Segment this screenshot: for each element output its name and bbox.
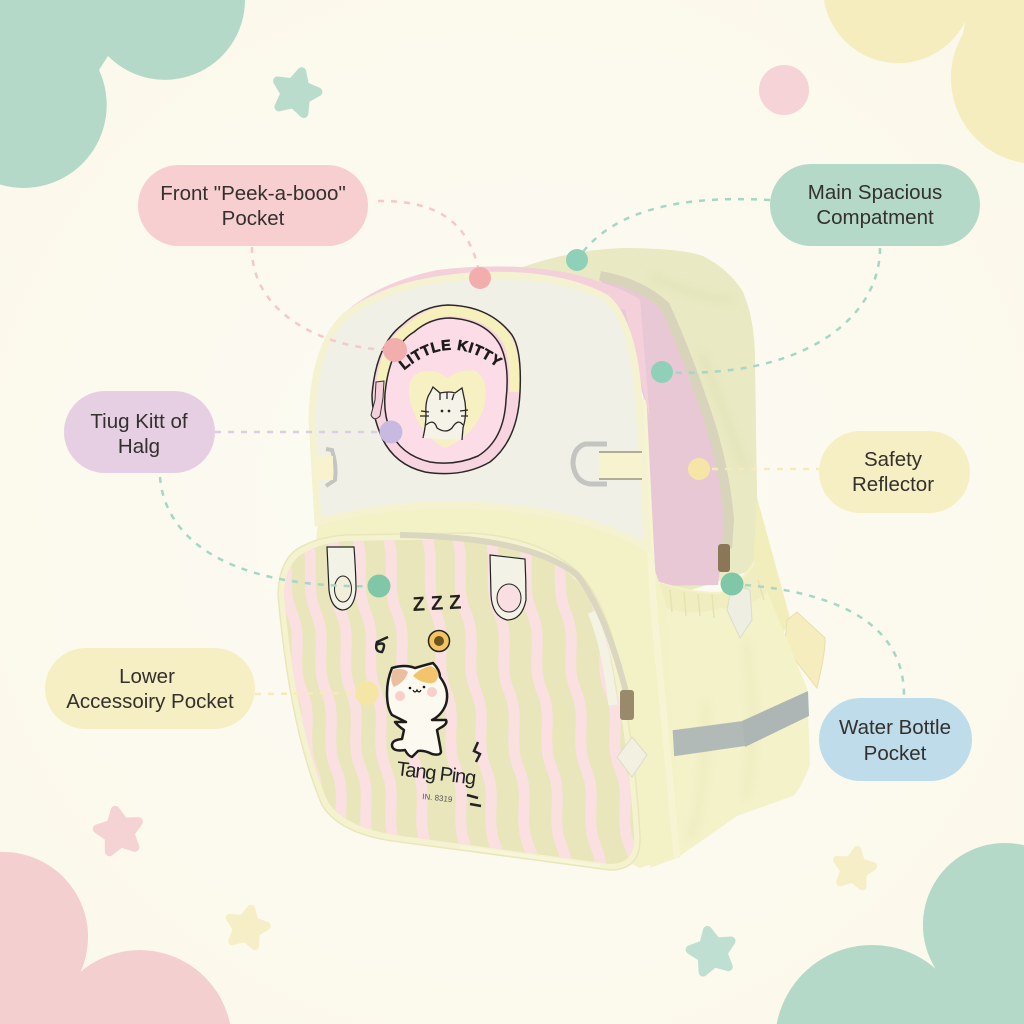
- rear body panel: [520, 248, 757, 600]
- zipper pull: [371, 381, 384, 419]
- label: safety reflector: Reflector: [852, 473, 934, 496]
- decoration: green star top: [271, 66, 322, 116]
- pocket zipper: [400, 535, 626, 692]
- label: lower accessory pocket: [45, 648, 255, 729]
- label: lower accessory pocket: Lower: [119, 665, 175, 688]
- reflective strip: [667, 721, 745, 757]
- badge inner: [385, 318, 507, 463]
- connector: main compartment top: [577, 199, 770, 260]
- label: water bottle pocket: [819, 698, 972, 781]
- yarn bubble icon: [428, 630, 450, 652]
- connector: safety reflector: [699, 468, 819, 470]
- little kitty badge: [370, 304, 522, 474]
- back strap and tab: [750, 490, 825, 688]
- badge outer: [372, 305, 520, 474]
- left loop tab: [327, 547, 356, 610]
- badge heart: [409, 370, 486, 448]
- decoration: bottom-left pink cloud: [0, 852, 230, 1024]
- label: main spacious compartment: Main Spacious: [808, 181, 942, 204]
- tang ping text: Tang Ping: [395, 758, 477, 790]
- lower body: [300, 508, 680, 868]
- connector: front pocket top: [378, 201, 480, 278]
- kitten character: [387, 663, 447, 757]
- label: lower accessory pocket: Accessoiry Pocket: [66, 690, 234, 713]
- label: water bottle pocket: Pocket: [864, 742, 927, 765]
- label: safety reflector: Safety: [864, 448, 923, 471]
- label: tiug kitt of halg: [64, 391, 215, 473]
- pocket zipper tape: [592, 612, 613, 705]
- side water bottle pocket: [650, 560, 810, 868]
- wavy stripes: [284, 540, 634, 864]
- pocket print base: [284, 539, 634, 864]
- right loop tab: [490, 555, 526, 620]
- connector: lower left loop: [160, 477, 379, 586]
- d-ring right: [573, 444, 642, 484]
- decoration: bottom-right green cloud: [777, 843, 1024, 1024]
- front pocket: [277, 532, 641, 871]
- d-ring left: [315, 449, 336, 486]
- connector: kitten badge: [215, 431, 391, 433]
- label: front peek-a-booo pocket: [138, 165, 368, 246]
- marker dots: [355, 249, 744, 705]
- badge title path: [397, 350, 505, 377]
- label: front peek-a-booo pocket: Front "Peek-a-booo": [160, 182, 346, 205]
- decoration: pink star left: [95, 807, 143, 853]
- decoration: yellow star right: [833, 847, 875, 888]
- label: main spacious compartment: Compatment: [816, 206, 934, 229]
- label: tiug kitt of halg: Halg: [118, 435, 160, 458]
- serial text: IN. 8319: [422, 792, 453, 804]
- pink side panel: [600, 278, 726, 586]
- small doodle: [376, 637, 388, 652]
- gathered elastic folds: [670, 580, 764, 618]
- main zipper pull: [718, 544, 752, 638]
- label: safety reflector: [819, 431, 970, 513]
- connector: main compartment side: [662, 248, 880, 373]
- decoration: yellow star bottom left: [225, 905, 270, 948]
- upper front panel: [312, 266, 650, 548]
- connector: lower accessory pocket: [255, 693, 367, 694]
- decoration: top-left green cloud: [0, 0, 245, 188]
- connector: water bottle pocket: [732, 584, 904, 697]
- main compartment zipper: [600, 276, 729, 548]
- pocket bottom seam: [460, 847, 600, 866]
- badge kitten: [420, 387, 468, 440]
- decoration: top-right yellow cloud: [824, 0, 1024, 163]
- label: tiug kitt of halg: Tiug Kitt of: [90, 410, 188, 433]
- label: water bottle pocket: Water Bottle: [839, 716, 951, 739]
- piping edge of body: [643, 400, 677, 858]
- fabric shading: [650, 275, 745, 470]
- pocket zipper pull: [617, 690, 647, 777]
- lightning doodle: [474, 742, 480, 762]
- dash doodle: [467, 795, 481, 806]
- decoration: pink circle top: [759, 65, 809, 115]
- label: main spacious compartment: [770, 164, 980, 246]
- badge title: LITTLE KITTY: [398, 339, 504, 370]
- pocket shell: [278, 533, 640, 870]
- connector: front pocket badge: [252, 247, 395, 350]
- badge zipper ring: [380, 311, 514, 395]
- zzz text: ZZZ: [412, 591, 468, 616]
- backpack illustration: [277, 248, 826, 871]
- label: front peek-a-booo pocket: Pocket: [222, 207, 285, 230]
- decoration: green star bottom: [687, 926, 736, 974]
